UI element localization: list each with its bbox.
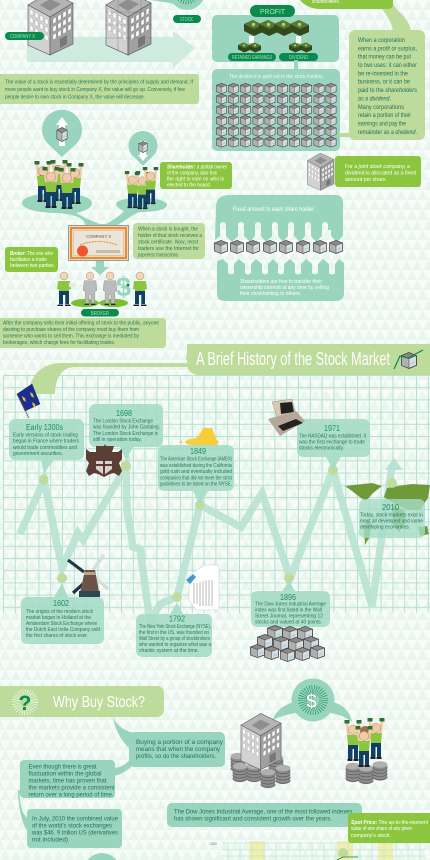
timeline: 1698: still in operation today.	[93, 437, 142, 443]
timeline: 1896: index was first listed in the Wall	[255, 608, 322, 614]
callout: fluctuation: the markets provide a consistent	[28, 784, 115, 792]
panel: dividend paid to stock holders: The dividend is paid out to the stock holders.	[229, 74, 324, 80]
icon: gold pile	[179, 428, 219, 446]
callout: buying a portion	[129, 732, 225, 767]
timeline: 1896: 1896	[280, 593, 296, 602]
stock label: STOCK	[180, 17, 193, 23]
panel: shareholders transfer: Shareholders are free to transfer their	[240, 279, 322, 285]
text block: stock value: The value of a stock is essentially determined by the principles of supply and demand. If	[5, 80, 194, 86]
callout: fluctuation: fluctuation within the global	[28, 770, 102, 778]
callout: fluctuation: return over a long period of time.	[28, 792, 114, 798]
timeline: 1849: The American Stock Exchange (AMEX)	[160, 456, 232, 462]
callout: joint stock company	[335, 156, 421, 187]
text block: corporation profit: that money can be put	[358, 54, 411, 61]
timeline: 1896	[251, 581, 330, 627]
icon: dollar circle with arms: $	[306, 691, 317, 713]
text block: corporation profit: retain a portion of their	[358, 112, 411, 119]
timeline: 2010: Today, stock markets exist in	[360, 512, 423, 518]
callout: top shareholder box	[300, 0, 393, 9]
callout: joint stock company: dividend is allocated as a fixed	[345, 170, 416, 176]
graph paper grid	[3, 375, 430, 613]
timeline: 1698	[89, 404, 163, 460]
curved connectors to right column	[374, 0, 411, 31]
icon: world map	[345, 483, 430, 545]
timeline: 1971: The NASDAQ was established. It	[299, 434, 366, 440]
timeline: 1896: The Dow Jones Industrial Average	[255, 602, 326, 608]
timeline: 1849	[158, 445, 234, 505]
timeline: 1792: 1792	[169, 614, 185, 624]
icon: stock certificate	[68, 226, 128, 260]
timeline: 1602: 1602	[53, 599, 69, 608]
connector: dividend text	[339, 133, 351, 137]
broker label: BROKER	[91, 311, 109, 317]
text block: brokerage: After the company sells their initial offering of stock to the public, anyone	[3, 320, 159, 326]
panel: fixed amount: Fixed amount to each share holder.	[233, 206, 315, 213]
crowd: many shareholders	[34, 160, 84, 209]
icon: vintage computer	[268, 399, 305, 436]
callout: stock certificate text: stock certificate. Now, most	[138, 240, 199, 246]
timeline: 1602: The origins of the modern stock	[26, 609, 93, 615]
pin: falling demand	[128, 131, 158, 166]
timeline: early 1300s: would trade commodities and	[13, 445, 77, 451]
heading band: a brief history	[28, 344, 430, 394]
timeline: 1602: the first shares of stock ever.	[26, 633, 88, 639]
stock cube row	[214, 240, 342, 254]
icon: question mark: ?	[18, 692, 31, 715]
callout: buying a portion: means that when the company	[136, 746, 221, 753]
timeline: 1602	[21, 583, 104, 644]
market timeline chart line	[20, 458, 403, 622]
panel: profit	[212, 5, 339, 62]
callout: spot price	[348, 813, 430, 843]
timeline: 1849: was established during the California	[160, 463, 232, 469]
callout: dow jones	[167, 803, 362, 827]
panel: shareholders transfer: their stockholding to others.	[240, 291, 301, 297]
timeline: 1896: stocks and valued at 40 points.	[255, 620, 322, 626]
callout: shareholder definition: of the company, also has	[167, 170, 217, 176]
bottom chart fragment: 1500	[209, 842, 217, 846]
icon: dollar circle with arms	[273, 678, 352, 722]
text block: brokerage	[0, 318, 166, 348]
company x label: COMPANY X	[10, 34, 35, 40]
icon: stock circle	[150, 0, 205, 10]
timeline: early 1300s: began in France where traders	[13, 439, 79, 445]
callout: stock certificate text: paperless transactions.	[138, 252, 179, 258]
timeline: 1849: companies that did not meet the strict	[160, 475, 232, 481]
icon: dollar sign: $	[116, 272, 131, 302]
timeline: 1849: guidelines to be listed on the NYSE.	[160, 482, 232, 488]
callout: world exchange value: was $46. 9 trillion US (derivatives	[31, 830, 118, 836]
timeline: 1602: the Dutch East India Company sold	[26, 627, 100, 633]
heading band: why buy stock	[0, 686, 164, 717]
icon: windmill	[68, 555, 108, 597]
callout: fluctuation: markets, time has proven that	[28, 778, 107, 784]
text block: brokerage: desiring to purchase shares of the company must buy them from	[3, 327, 139, 333]
timeline: 2010	[359, 499, 425, 538]
timeline: 1971: 1971	[324, 424, 340, 433]
timeline: 1971: stocks electronically.	[299, 446, 344, 452]
icon: company building	[28, 0, 73, 55]
callout: stock certificate text: When a stock is bought, the	[138, 226, 198, 232]
text block: corporation profit: be re-invested in the	[358, 70, 409, 77]
timeline: 1849: gold rush and eventually included	[160, 469, 232, 475]
timeline: early 1300s	[9, 419, 84, 473]
pin: rising demand	[42, 110, 82, 157]
icon: cash stacks	[238, 20, 312, 53]
timeline: 1792: The New York Stock Exchange (NYSE),	[139, 624, 211, 630]
callout: spot price: company's stock.	[351, 833, 391, 839]
timeline: 1602: Amsterdam Stock Exchange where	[26, 621, 97, 627]
timeline: early 1300s: government securities.	[13, 451, 63, 457]
panel: shareholders transfer: ownership interest at any time by selling	[240, 285, 329, 291]
callout: world exchange value: of the world's stock exchanges	[32, 822, 112, 830]
panel: fixed amount	[215, 195, 343, 242]
callout: stock certificate text: holder of that stock receives a	[138, 233, 202, 239]
profit label: PROFIT	[260, 7, 285, 16]
timeline: 1792: Wall Street by a group of stockbrokers	[139, 636, 210, 642]
timeline: 1849: 1849	[190, 447, 206, 456]
icon: stock certificate: COMPANY X	[86, 234, 111, 239]
arrow down from certificate	[91, 261, 109, 275]
text block: corporation profit	[349, 30, 425, 140]
timeline: 1792: who wanted to organize what was a	[139, 642, 211, 648]
stock label	[173, 15, 201, 23]
broker label	[81, 309, 119, 317]
timeline: 1602: market began in Holland at the	[26, 615, 91, 621]
icon: french flag	[17, 384, 40, 418]
icon: cheering shareholders on coins	[344, 718, 387, 784]
icon: joint stock building	[307, 153, 334, 190]
text block: corporation profit: earnings and pay the	[358, 120, 407, 128]
callout: fluctuation: Even though there is great	[28, 764, 97, 770]
stock cube grid	[216, 83, 336, 94]
callout: stock certificate text	[133, 223, 205, 259]
callout: joint stock company: For a joint stock company, a	[345, 164, 410, 170]
callout: buying a portion: profits, so do the shareholders.	[136, 753, 216, 760]
ellipses and connector under crowds	[22, 193, 167, 226]
text block: corporation profit: When a corporation	[358, 37, 405, 44]
timeline: 1698: 1698	[116, 409, 132, 418]
timeline: 1792: chaotic system at the time.	[139, 648, 199, 654]
text block: stock value: more people want to buy stock in Company X, the value will go up. Conversely, if few	[5, 87, 185, 93]
company x label	[5, 32, 44, 40]
timeline: 1698: The London Stock Exchange is	[93, 431, 158, 437]
text block: brokerage: brokerages, which charge fees for facilitating trades.	[3, 340, 115, 346]
connector: question to buying box	[113, 717, 135, 750]
text block: corporation profit: as a dividend.	[358, 95, 391, 102]
callout: world exchange value	[27, 809, 122, 848]
panel: shareholders transfer	[217, 259, 344, 301]
icon: divided company building	[106, 0, 152, 56]
callout: broker definition: Broker: The one who	[10, 251, 53, 257]
text block: stock value: people desire to own stock in Company X, the value will decrease.	[5, 95, 145, 101]
callout: shareholder definition: elected to the board.	[167, 182, 211, 188]
callout: dow jones: has shown significant and consistent growth over the years.	[174, 816, 332, 822]
heading band: why buy stock: Why Buy Stock?	[53, 694, 145, 711]
callout: shareholder definition: Shareholder: a partial owner	[167, 164, 227, 170]
text block: corporation profit: paid to the shareholders	[358, 87, 417, 94]
timeline: 1896: Street Journal, representing 12	[255, 614, 323, 620]
callout: joint stock company: amount per share.	[345, 177, 387, 183]
timeline: 2010: 2010	[382, 503, 400, 512]
text block: corporation profit: business, or it can be	[358, 79, 411, 86]
timeline: 1698: The London Stock Exchange	[93, 418, 153, 424]
callout: spot price: value of one share of any given	[351, 826, 412, 832]
timeline milestone dots	[38, 461, 397, 602]
callout: shareholder definition: the right to vote on who is	[167, 176, 224, 182]
text block: corporation profit: Many corporations	[358, 104, 404, 111]
callout: broker definition	[5, 247, 58, 272]
timeline: early 1300s: Early versions of stock trading	[13, 432, 78, 438]
timeline: early 1300s: Early 1300s	[26, 423, 63, 432]
broker floor ellipses	[71, 299, 128, 307]
callout: dow jones: The Dow Jones Industrial Average, one of the most followed indexes,	[174, 808, 354, 816]
callout: broker definition: facilitates a trade	[10, 257, 47, 263]
icon: london stock exchange crest	[86, 444, 122, 477]
text block: stock value	[0, 74, 199, 104]
dividend label: DIVIDEND	[289, 55, 308, 61]
bottom chart fragment	[209, 841, 425, 860]
icon: stock with trend line	[394, 350, 423, 369]
timeline: 1792	[136, 602, 212, 657]
timeline: 1792: the first in the US, was founded on	[139, 630, 209, 636]
timeline: 1698: was founded by John Castaing.	[93, 425, 160, 431]
bottom circle	[84, 853, 120, 860]
crowd: few shareholders	[125, 167, 158, 209]
icon: new york stock exchange building	[186, 565, 219, 610]
text block: corporation profit: remainder as a dividend.	[358, 129, 417, 136]
panel: dividend paid to stock holders	[212, 60, 340, 151]
connector: curved links between text boxes	[18, 758, 131, 830]
timeline: 2010: developing economies.	[360, 524, 410, 530]
callout: spot price: Spot Price: The up-to-the-moment	[351, 820, 429, 826]
timeline: 2010: most all developed and some	[360, 518, 423, 524]
retained earnings label: RETAINED EARNINGS	[232, 55, 272, 61]
icon: building on coins	[231, 713, 290, 788]
text block: corporation profit: to two uses: it can either	[358, 62, 417, 69]
callout: buying a portion: Buying a portion of a company	[136, 739, 224, 746]
callout: shareholder definition	[160, 162, 232, 189]
callout: stock certificate text: traders use the Internet for	[138, 246, 199, 252]
callout: broker definition: between two parties.	[10, 263, 55, 269]
trade figures	[57, 272, 147, 306]
callout: world exchange value: In July, 2010 the combined value	[32, 816, 119, 822]
icon: pile of stock cubes	[251, 626, 324, 662]
callout: world exchange value: not included)	[32, 836, 68, 844]
callout: fluctuation	[20, 760, 115, 798]
arrow between buildings	[27, 31, 195, 68]
timeline: 1971	[297, 419, 370, 470]
timeline: 1971: was the first exchange to trade	[299, 440, 365, 446]
text block: corporation profit: earns a profit or surplus,	[358, 45, 417, 52]
text block: brokerage: someone who wants to sell them. This exchange is mediated by	[3, 334, 139, 340]
